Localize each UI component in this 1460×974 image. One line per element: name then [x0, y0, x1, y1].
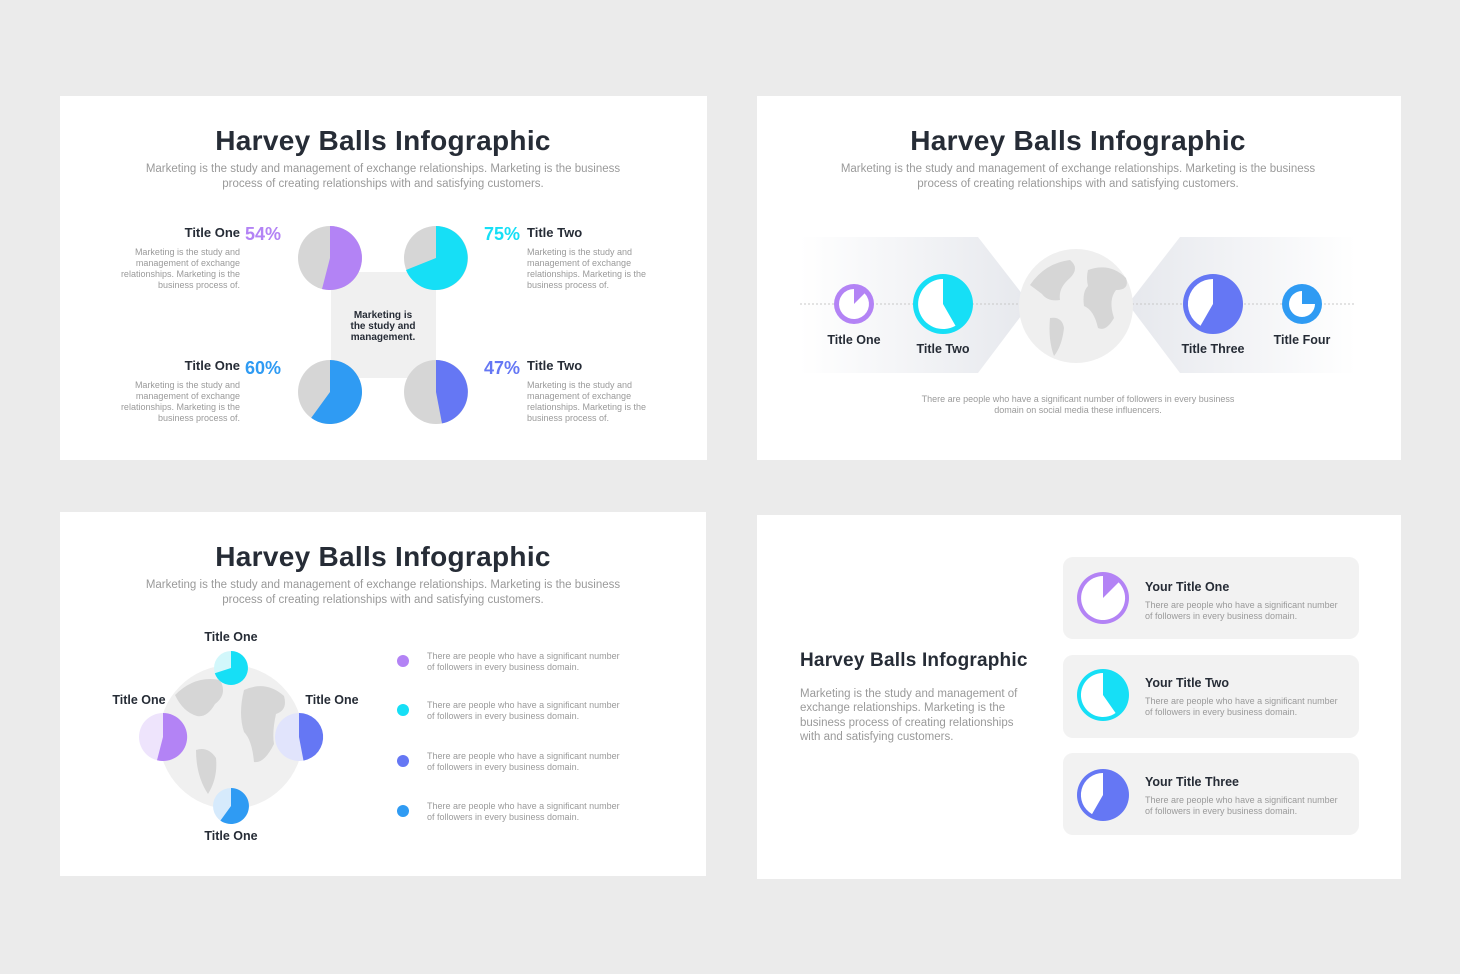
label TR — [484, 224, 646, 290]
title: Harvey Balls Infographic — [215, 541, 551, 572]
description: Marketing is the study and management of — [800, 688, 1018, 700]
label BR: relationships. Marketing is the — [527, 402, 646, 412]
pie top — [214, 651, 248, 685]
center box: Marketing is — [354, 310, 413, 321]
description: with and satisfying customers. — [799, 731, 953, 743]
label BL: management of exchange — [136, 391, 240, 401]
card 1 — [1063, 557, 1359, 639]
labels: Title One — [112, 693, 166, 707]
label TR: 75% — [484, 224, 520, 244]
legend list: There are people who have a significant number — [427, 751, 620, 761]
label BL: Marketing is the study and — [135, 380, 240, 390]
legend list: There are people who have a significant number — [427, 651, 620, 661]
card 3 — [1063, 753, 1359, 835]
card 1: of followers in every business domain. — [1145, 611, 1297, 621]
label TR: business process of. — [527, 280, 609, 290]
ball: Title Four: Title Four — [1274, 333, 1330, 347]
label BR: Marketing is the study and — [527, 380, 632, 390]
label TL: management of exchange — [136, 258, 240, 268]
legend list: of followers in every business domain. — [427, 812, 579, 822]
center box: the study and — [350, 321, 416, 332]
label BR: management of exchange — [527, 391, 631, 401]
subtitle: process of creating relationships with and satisfying customers. — [222, 178, 544, 190]
pie left — [139, 713, 187, 761]
pie 75% — [404, 226, 468, 290]
pie right — [275, 713, 323, 761]
labels: Title One — [204, 829, 258, 843]
label BL: 60% — [245, 358, 281, 378]
card 3: There are people who have a significant number — [1145, 795, 1338, 805]
globe — [1019, 249, 1133, 363]
ball: Title Two — [913, 274, 973, 356]
legend list: of followers in every business domain. — [427, 662, 579, 672]
label TL: relationships. Marketing is the — [121, 269, 240, 279]
pie bottom — [213, 788, 249, 824]
left band — [800, 237, 1030, 373]
globe — [159, 665, 303, 809]
label TR: Marketing is the study and — [527, 247, 632, 257]
label BR: Title Two — [527, 358, 582, 373]
label BR: business process of. — [527, 413, 609, 423]
labels — [112, 630, 359, 843]
caption: There are people who have a significant number of followers in every business — [922, 394, 1235, 404]
card 2 — [1063, 655, 1359, 738]
label TL — [121, 224, 281, 290]
subtitle: Marketing is the study and management of exchange relationships. Marketing is the business — [146, 163, 620, 175]
card 2: There are people who have a significant number — [1145, 696, 1338, 706]
legend list: There are people who have a significant number — [427, 801, 620, 811]
legend list: of followers in every business domain. — [427, 711, 579, 721]
description: business process of creating relationships — [800, 717, 1014, 729]
label BL: relationships. Marketing is the — [121, 402, 240, 412]
ball: Title Three — [1182, 274, 1245, 356]
caption: domain on social media these influencers. — [994, 405, 1162, 415]
label BL: Title One — [185, 358, 240, 373]
legend list: of followers in every business domain. — [427, 762, 579, 772]
card 2: of followers in every business domain. — [1145, 707, 1297, 717]
label TL: business process of. — [158, 280, 240, 290]
subtitle: Marketing is the study and management of exchange relationships. Marketing is the business — [146, 579, 620, 591]
card 3: Your Title Three — [1145, 775, 1239, 789]
pie 60% — [298, 360, 362, 424]
panel: bottom-left globe — [60, 512, 706, 876]
card 2: Your Title Two — [1145, 676, 1229, 690]
label TL: 54% — [245, 224, 281, 244]
card 1: There are people who have a significant number — [1145, 600, 1338, 610]
ball: Title One — [827, 284, 881, 347]
card 3: of followers in every business domain. — [1145, 806, 1297, 816]
title: Harvey Balls Infographic — [800, 650, 1028, 671]
label BR — [484, 358, 646, 423]
title: Harvey Balls Infographic — [215, 125, 551, 156]
subtitle: process of creating relationships with and satisfying customers. — [222, 594, 544, 606]
label BR: 47% — [484, 358, 520, 378]
panel: top-left harvey pies — [60, 96, 707, 460]
panel: bottom-right cards — [757, 515, 1401, 879]
ball: Title One: Title One — [827, 333, 881, 347]
ball: Title Four — [1274, 284, 1330, 347]
ball: Title Two: Title Two — [916, 342, 970, 356]
label BL — [121, 358, 281, 423]
panel: top-right harvey timeline — [757, 96, 1401, 460]
subtitle: process of creating relationships with and satisfying customers. — [917, 178, 1239, 190]
card 1: Your Title One — [1145, 580, 1229, 594]
label TL: Title One — [185, 225, 240, 240]
right band — [1128, 237, 1356, 373]
ball: Title Three: Title Three — [1182, 342, 1245, 356]
center box — [331, 272, 436, 378]
label BL: business process of. — [158, 413, 240, 423]
title: Harvey Balls Infographic — [910, 125, 1246, 156]
legend list — [397, 651, 620, 822]
subtitle: Marketing is the study and management of exchange relationships. Marketing is the business — [841, 163, 1315, 175]
pie 47% — [404, 360, 468, 424]
label TR: management of exchange — [527, 258, 631, 268]
center box: management. — [351, 332, 415, 343]
label TR: relationships. Marketing is the — [527, 269, 646, 279]
label TR: Title Two — [527, 225, 582, 240]
description: exchange relationships. Marketing is the — [800, 702, 1005, 714]
labels: Title One — [305, 693, 359, 707]
legend list: There are people who have a significant number — [427, 700, 620, 710]
labels: Title One — [204, 630, 258, 644]
pie 54% — [298, 226, 362, 290]
label TL: Marketing is the study and — [135, 247, 240, 257]
